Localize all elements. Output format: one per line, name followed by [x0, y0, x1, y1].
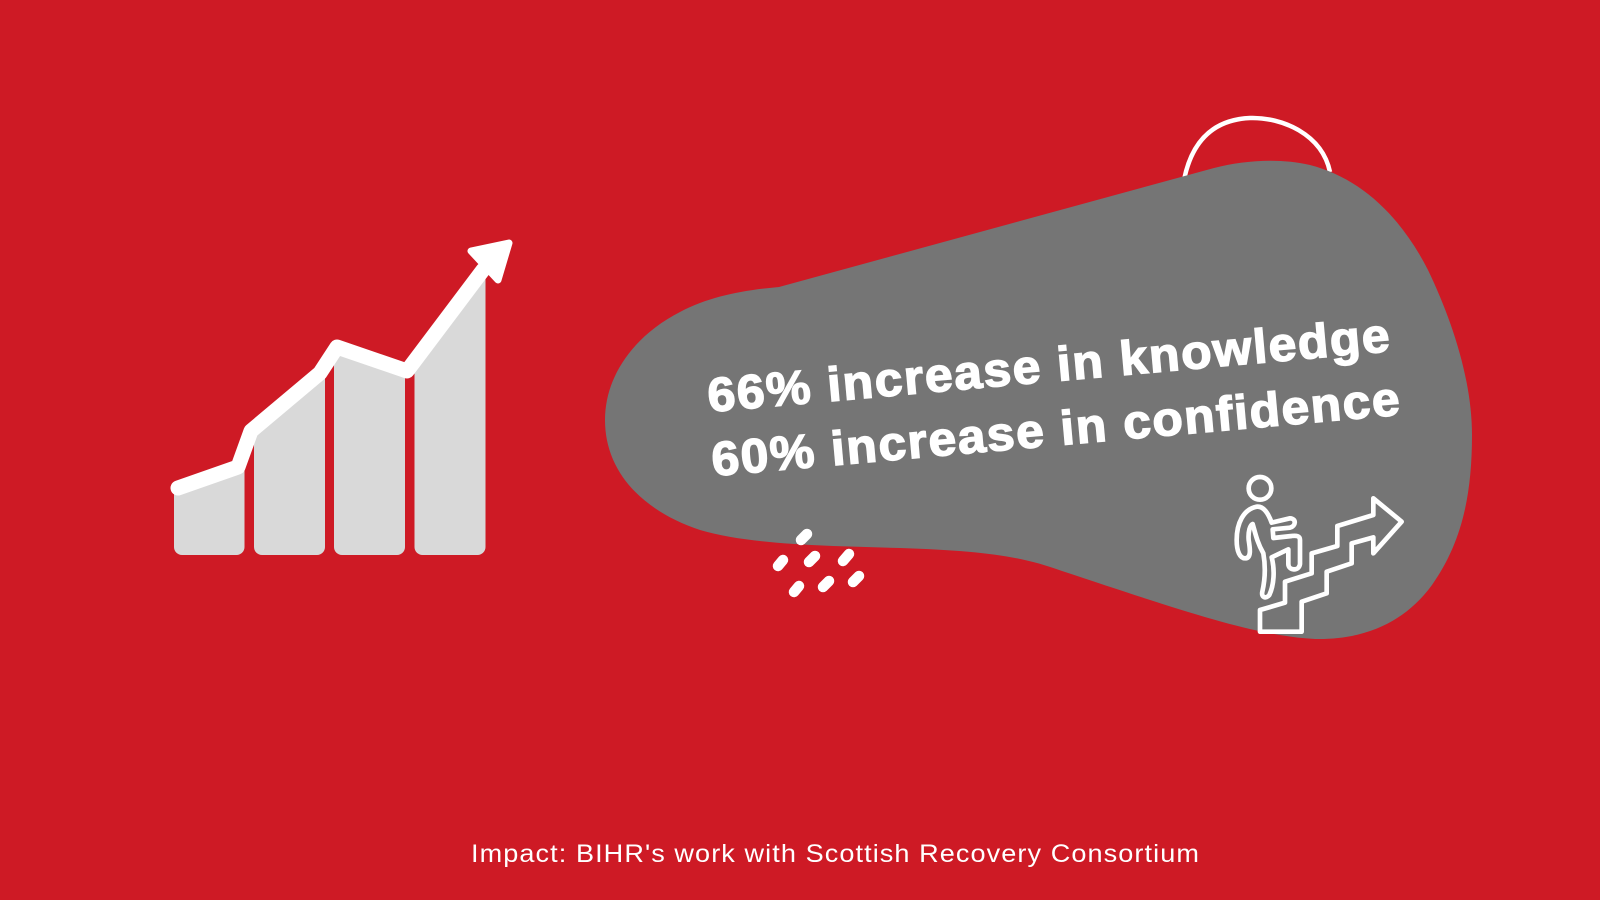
- headline statistics: [705, 309, 1403, 487]
- arrowhead: [471, 243, 509, 280]
- footer caption: Impact: BIHR's work with Scottish Recovery Consortium: [471, 840, 1200, 868]
- grey blob panel: [605, 161, 1472, 639]
- decorative arc above blob: [1184, 118, 1330, 180]
- chart icon: rising bars with arrow: [174, 243, 509, 555]
- icon: person climbing stairs: [1237, 477, 1402, 632]
- stat: confidence: 60% increase in confidence: [709, 373, 1403, 487]
- trend line: [178, 270, 483, 488]
- bars: [174, 272, 486, 555]
- decorative dots: [778, 534, 859, 592]
- stat: knowledge: 66% increase in knowledge: [705, 309, 1393, 423]
